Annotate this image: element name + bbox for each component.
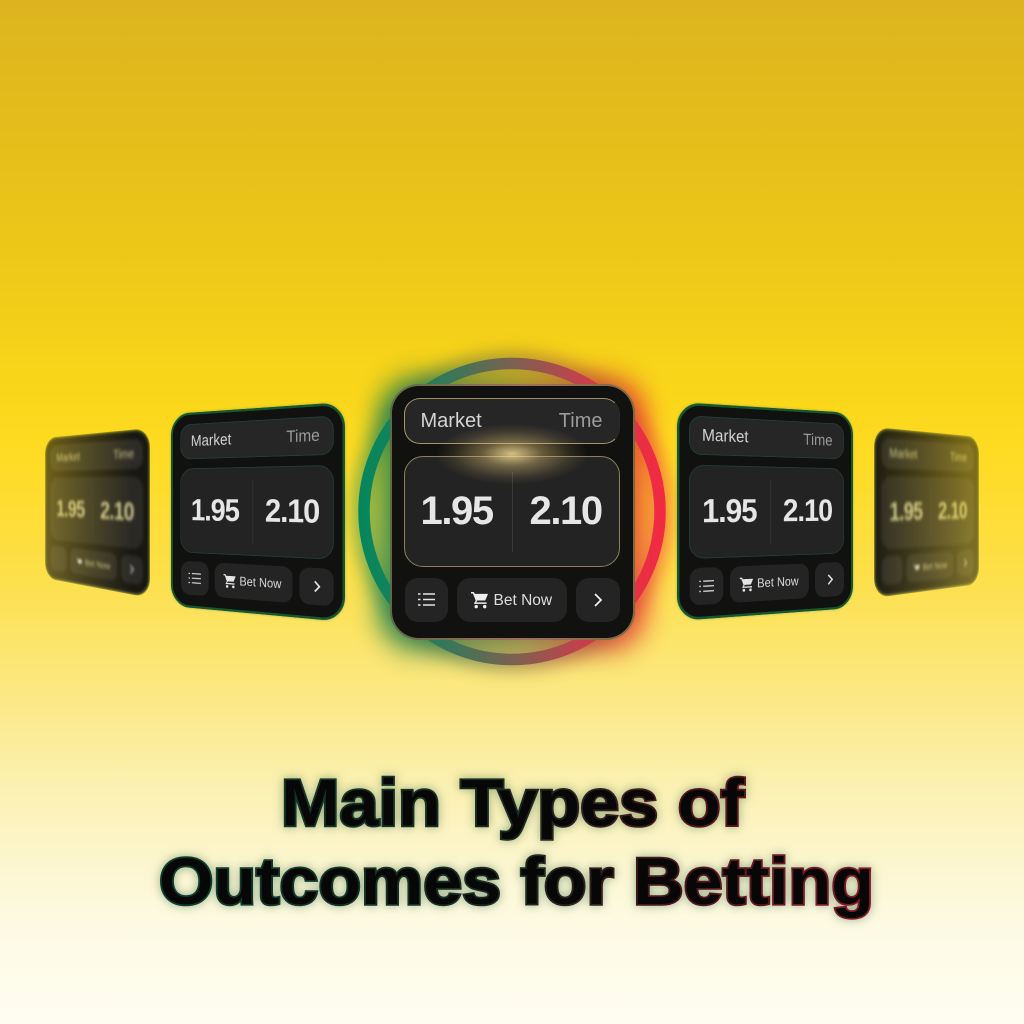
far right card: 1.95 — [889, 497, 922, 526]
label: time: Time — [286, 426, 320, 446]
bet now button — [456, 578, 566, 622]
list button — [181, 560, 208, 596]
label: time: Time — [559, 410, 602, 432]
far left card: 1.95 — [56, 496, 85, 523]
bet now text: Bet Now — [757, 574, 799, 590]
next button — [299, 567, 333, 606]
label: market: Market — [702, 426, 748, 446]
odds panel — [180, 465, 333, 559]
next button — [815, 562, 844, 597]
far right card: Bet Now — [923, 560, 947, 572]
odd 1.95: 1.95 — [420, 488, 493, 532]
label: time: Time — [803, 431, 833, 449]
ring glow — [345, 343, 677, 680]
far right card: Time — [950, 450, 967, 464]
odd 2.10: 2.10 — [783, 493, 832, 528]
far left card: Time — [113, 447, 134, 462]
far right card — [874, 427, 979, 598]
far right card: 2.10 — [938, 498, 967, 524]
title — [154, 766, 878, 926]
odd 1.95: 1.95 — [191, 493, 239, 528]
far left card: 2.10 — [100, 497, 134, 526]
market header — [689, 415, 844, 459]
market header — [180, 415, 333, 459]
far right card: Market — [889, 446, 917, 462]
far left card — [45, 428, 150, 598]
bet now button — [730, 563, 808, 603]
right card — [677, 402, 853, 621]
odds panel — [404, 456, 620, 566]
bet now text: Bet Now — [239, 575, 281, 591]
odd 2.10: 2.10 — [530, 488, 602, 532]
list button — [689, 567, 723, 605]
center card — [390, 384, 635, 640]
next button — [576, 578, 620, 622]
label: market: Market — [420, 410, 482, 432]
bet now button — [214, 562, 292, 603]
ring: green to red circle — [358, 358, 666, 666]
odds panel — [689, 464, 844, 559]
label: market: Market — [191, 431, 231, 450]
far left card: Bet Now — [85, 558, 110, 572]
left card — [171, 402, 345, 622]
gold glow — [436, 424, 586, 484]
far left card: Market — [56, 450, 80, 464]
odd 2.10: 2.10 — [265, 493, 319, 530]
bet now text: Bet Now — [494, 592, 552, 608]
title: Outcomes for Betting — [159, 844, 874, 918]
market header — [404, 398, 620, 444]
title: Main Types of — [281, 766, 745, 840]
card glow — [378, 376, 646, 652]
list button — [404, 578, 448, 622]
odd 1.95: 1.95 — [702, 492, 757, 529]
